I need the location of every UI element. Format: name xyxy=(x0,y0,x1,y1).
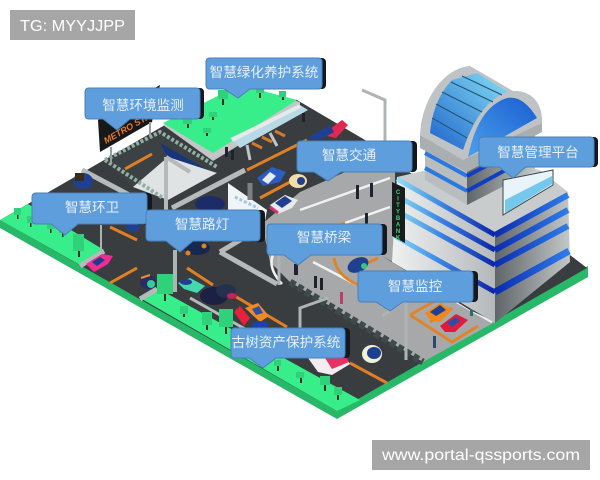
building screen xyxy=(503,170,553,215)
green strip: lower edge xyxy=(140,288,360,411)
label: 智慧监控 xyxy=(358,271,478,311)
label: 智慧桥梁 xyxy=(267,224,387,265)
city bank sign: K xyxy=(396,236,401,242)
label: 智慧环卫 xyxy=(32,193,152,235)
building arched roof xyxy=(420,66,542,172)
trees xyxy=(14,88,342,400)
building lower block xyxy=(392,160,570,323)
billboard xyxy=(98,85,160,163)
city base platform xyxy=(0,88,588,419)
pedestrian walkway xyxy=(262,150,495,362)
metro entrance xyxy=(105,132,217,212)
city bank sign: T xyxy=(396,203,400,209)
label: 智慧环境监测 xyxy=(85,88,204,130)
label: 智慧管理平台: 智慧管理平台 xyxy=(497,145,579,160)
label: 智慧绿化养护系统: 智慧绿化养护系统 xyxy=(210,65,319,80)
watermark: TG handle xyxy=(10,10,135,40)
label: 古树资产保护系统 xyxy=(231,328,350,368)
label: 智慧监控: 智慧监控 xyxy=(388,279,443,294)
city bank sign: N xyxy=(396,229,400,235)
city bank sign: A xyxy=(396,222,401,228)
street lamps xyxy=(101,90,406,360)
label: 智慧路灯 xyxy=(146,210,265,252)
building base shadow xyxy=(382,256,495,322)
billboard: METRO STA xyxy=(102,111,152,146)
smart building xyxy=(392,66,570,323)
bridge fence xyxy=(290,282,423,362)
green strip: left corner xyxy=(0,204,104,265)
pedestrians xyxy=(225,113,473,348)
label: 智慧环境监测: 智慧环境监测 xyxy=(102,98,184,113)
building upper block xyxy=(425,135,535,205)
city bank sign xyxy=(392,182,405,243)
label: 古树资产保护系统: 古树资产保护系统 xyxy=(232,335,341,350)
label: 智慧交通: 智慧交通 xyxy=(322,147,377,163)
label: 智慧交通 xyxy=(297,141,417,181)
cars xyxy=(73,120,468,375)
canopy xyxy=(230,105,308,160)
station board xyxy=(228,183,267,233)
watermark: website xyxy=(372,440,590,470)
label: 智慧路灯: 智慧路灯 xyxy=(175,217,230,232)
label: 智慧绿化养护系统 xyxy=(206,58,326,98)
watermark: website: www.portal-qssports.com xyxy=(381,447,580,464)
city bank sign: Y xyxy=(396,210,400,216)
rooftop plaza xyxy=(163,85,300,161)
city bank sign: B xyxy=(396,216,401,222)
label: 智慧管理平台 xyxy=(479,137,598,178)
city bank sign: C xyxy=(396,190,401,196)
label: 智慧桥梁: 智慧桥梁 xyxy=(297,230,352,245)
label: 智慧环卫: 智慧环卫 xyxy=(65,200,119,215)
city bank sign: I xyxy=(397,196,399,202)
parking bays xyxy=(410,298,478,342)
watermark: TG handle: TG: MYYJJPP xyxy=(20,18,125,35)
road curbs and lane markings xyxy=(50,140,387,383)
